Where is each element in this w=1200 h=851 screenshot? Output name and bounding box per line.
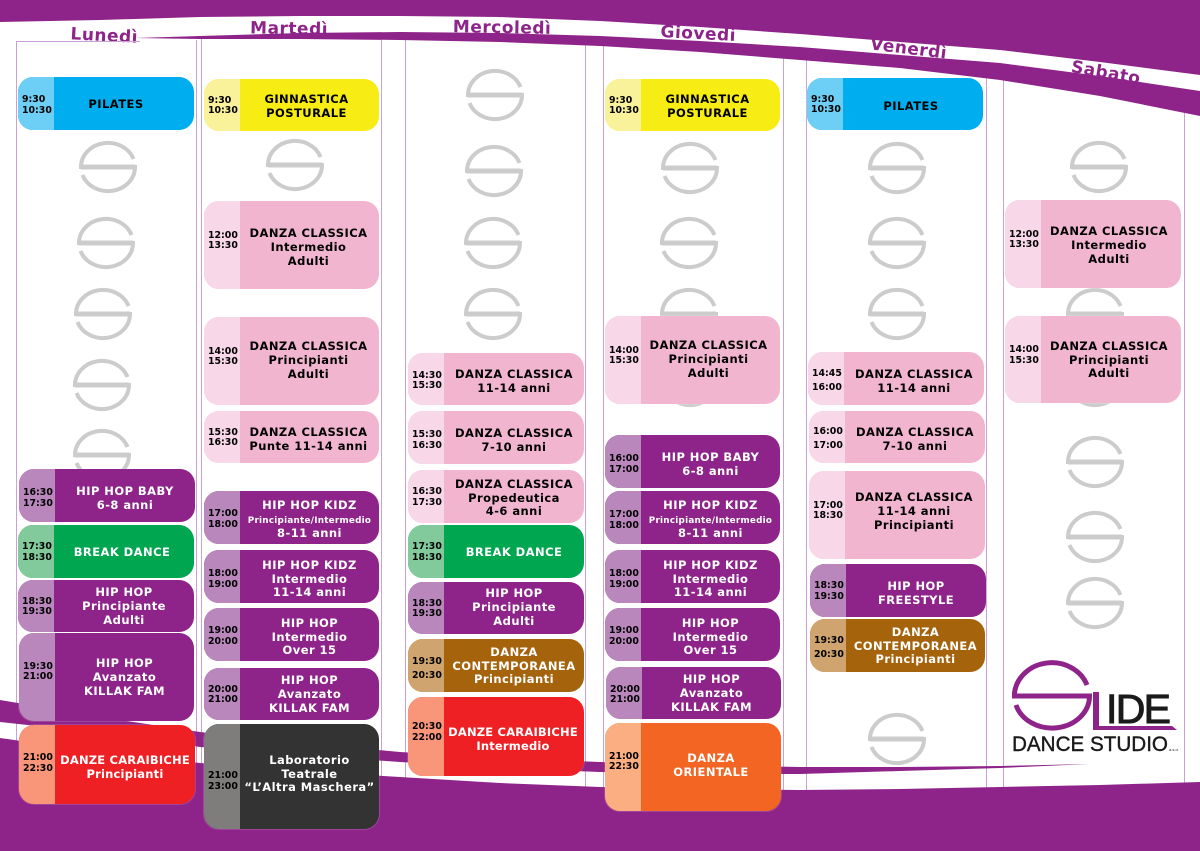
class: Danza Contemporanea: Principianti — [474, 672, 554, 686]
class: Hip Hop Avanzato: HIP HOP — [281, 673, 338, 687]
class: Hip Hop Avanzato: KILLAK FAM — [269, 701, 350, 715]
heading: Venerdì: Venerdì — [869, 34, 948, 64]
class: Hip Hop Principiante: Adulti — [103, 613, 145, 627]
class: Break Dance: 18:30 — [22, 552, 52, 562]
class: Hip Hop Intermedio: 19:00 — [208, 625, 238, 636]
class: Hip Hop Intermedio: Over 15 — [283, 643, 336, 657]
class: Danza Contemporanea: DANZA — [892, 625, 939, 639]
class: Danza Classica Intermedio: DANZA CLASSICA — [1050, 224, 1168, 238]
class: Hip Hop Kidz Intermedio — [605, 550, 780, 603]
class: Danza Classica 11-14: 11-14 anni — [477, 381, 551, 395]
class: Danze Caraibiche: 22:30 — [23, 762, 53, 774]
class: Danza Classica 7-10: 7-10 anni — [883, 439, 947, 453]
class: Hip Hop Principiante — [18, 580, 194, 632]
class: Danza Classica 11-14: 15:30 — [412, 380, 442, 391]
class: Hip Hop Kidz Intermedio: 11-14 anni — [674, 585, 747, 599]
class: Ginnastica Posturale — [204, 79, 379, 131]
class: Danza Classica 11-14: 16:00 — [812, 382, 842, 392]
class: Laboratorio Teatrale: 21:00 — [208, 770, 238, 781]
class: Hip Hop Baby: 16:00 — [609, 453, 639, 464]
class: Danza Classica 7-10: 7-10 anni — [482, 440, 546, 454]
class: Hip Hop Baby: 6-8 anni — [682, 464, 739, 478]
top purple swoosh — [135, 32, 1200, 116]
class: Pilates — [18, 77, 194, 130]
class: Danza Classica 11-14 — [408, 353, 584, 405]
class: Hip Hop Freestyle: HIP HOP — [887, 579, 945, 593]
class: Ginnastica Posturale: 9:30 — [609, 95, 632, 106]
class: Danza Classica 11-14 — [808, 352, 984, 405]
class: Hip Hop Principiante: HIP HOP — [485, 586, 543, 600]
heading: Lunedì: Lunedì — [70, 24, 139, 48]
class: Danze Caraibiche: 20:30 — [412, 721, 442, 732]
class: Break Dance: 17:30 — [412, 541, 442, 552]
class: Danza Classica 11-14 Principianti: 11-14 anni — [877, 504, 951, 518]
class: Hip Hop Principiante: 19:30 — [412, 608, 442, 619]
watermark S marks — [75, 71, 1126, 763]
class: Hip Hop Baby: 17:00 — [609, 464, 639, 474]
class: Hip Hop Avanzato: KILLAK FAM — [84, 684, 165, 698]
class: Hip Hop Kidz Principiante: Principiante/Intermedio — [649, 516, 772, 526]
class: Danza Classica Principianti: 15:30 — [208, 356, 238, 367]
class: Danza Classica Principianti: DANZA CLASSICA — [650, 338, 767, 352]
class: Danza Classica Intermedio: 13:30 — [1009, 239, 1039, 250]
class: Danza Classica Principianti: 15:30 — [1009, 354, 1039, 366]
class: Hip Hop Kidz Principiante: 18:00 — [208, 518, 238, 530]
class: Danza Classica Propedeutica: 17:30 — [412, 496, 442, 508]
class: Danza Classica Principianti — [204, 317, 379, 405]
class: Danza Classica Intermedio: 12:00 — [1009, 229, 1039, 240]
class: Pilates — [807, 78, 983, 130]
class: Danza Classica Intermedio — [1005, 200, 1181, 288]
class: Danza Classica Principianti: Adulti — [688, 366, 729, 380]
class: Danze Caraibiche: Intermedio — [476, 738, 550, 752]
class: Hip Hop Freestyle: FREESTYLE — [878, 592, 954, 606]
class: Danza Contemporanea: 19:30 — [814, 634, 844, 646]
class: Danza Classica 11-14 Principianti: 18:30 — [813, 510, 843, 521]
class: Hip Hop Principiante: 18:30 — [412, 598, 442, 609]
class: Hip Hop Kidz Intermedio: Intermedio — [673, 572, 748, 586]
class: Ginnastica Posturale: 9:30 — [208, 95, 231, 106]
class: Pilates: 10:30 — [811, 104, 841, 115]
class: Hip Hop Baby — [605, 435, 780, 488]
class: Hip Hop Baby: HIP HOP BABY — [76, 484, 174, 498]
class: Danze Caraibiche — [19, 725, 195, 804]
class: Hip Hop Avanzato: KILLAK FAM — [671, 700, 752, 714]
class: Ginnastica Posturale: POSTURALE — [266, 106, 347, 120]
class: Laboratorio Teatrale: Teatrale — [281, 767, 338, 781]
class: Hip Hop Principiante — [408, 582, 584, 634]
heading: Martedì: Martedì — [250, 18, 328, 40]
class: Danza Classica Propedeutica — [408, 470, 584, 523]
class: Danza Orientale: 22:30 — [609, 761, 639, 772]
logo L mark — [1093, 692, 1177, 730]
column: Sabato — [1005, 200, 1181, 403]
class: Danze Caraibiche: Principianti — [87, 766, 163, 780]
class: Danza Classica Principianti: DANZA CLASSICA — [250, 339, 367, 353]
class: Danze Caraibiche: DANZE CARAIBICHE — [60, 753, 190, 767]
heading: Mercoledì: Mercoledì — [453, 17, 551, 39]
class: Hip Hop Baby: 17:30 — [23, 498, 53, 508]
class: Hip Hop Intermedio: 19:00 — [609, 625, 639, 636]
top purple band — [0, 0, 1200, 75]
class: Hip Hop Intermedio: Over 15 — [684, 643, 737, 657]
class: Hip Hop Kidz Intermedio: 18:00 — [609, 568, 639, 579]
class: Danza Contemporanea: DANZA — [490, 645, 538, 659]
class: Danza Contemporanea — [408, 639, 584, 692]
class: Hip Hop Kidz Principiante: 18:00 — [609, 520, 639, 530]
class: Hip Hop Intermedio — [605, 608, 780, 661]
class: Danza Classica Principianti: Principianti — [269, 353, 348, 367]
class: Pilates: 10:30 — [22, 104, 52, 116]
class: Hip Hop Kidz Principiante: 17:00 — [609, 509, 639, 520]
class: Hip Hop Avanzato: Avanzato — [680, 686, 743, 700]
class: Danza Classica Punte: DANZA CLASSICA — [250, 425, 367, 439]
class: Hip Hop Intermedio: 20:00 — [208, 636, 238, 646]
class: Laboratorio Teatrale: “L’Altra Maschera” — [244, 780, 375, 794]
class: Danza Classica 7-10: 15:30 — [412, 429, 442, 440]
logo wordmark Dance Studio: DANCE STUDIO — [1012, 733, 1168, 756]
class: Danza Classica 11-14: 14:30 — [412, 370, 442, 381]
class: Pilates: 9:30 — [811, 94, 834, 105]
class: Danza Classica 7-10: 16:00 — [813, 426, 843, 437]
logo: Slide Dance Studio — [1012, 663, 1179, 756]
logo suffix: a.s.d. — [1169, 747, 1179, 752]
class: Danza Classica Intermedio: 13:30 — [208, 240, 238, 251]
class: Hip Hop Kidz Principiante — [204, 491, 379, 544]
class: Danza Classica 7-10: DANZA CLASSICA — [455, 426, 573, 440]
column: Lunedì — [18, 77, 196, 805]
class: Danza Contemporanea: 20:30 — [814, 648, 844, 660]
class: Hip Hop Kidz Principiante: HIP HOP KIDZ — [262, 498, 357, 512]
class: Hip Hop Kidz Intermedio: Intermedio — [272, 572, 347, 586]
class: Laboratorio Teatrale: 23:00 — [208, 780, 238, 792]
class: Danza Contemporanea: CONTEMPORANEA — [854, 639, 977, 653]
class: Danza Classica Intermedio: Adulti — [1088, 252, 1130, 266]
class: Danza Contemporanea: CONTEMPORANEA — [452, 659, 576, 673]
class: Danza Contemporanea: Principianti — [876, 652, 955, 666]
class: Danza Classica Intermedio: Intermedio — [271, 240, 346, 254]
class: Break Dance — [408, 525, 584, 578]
class: Danze Caraibiche — [408, 697, 584, 776]
class: Danza Classica 7-10 — [408, 411, 584, 464]
class: Danza Classica Principianti: 14:00 — [609, 345, 639, 356]
class: Danza Classica Principianti: 14:00 — [1009, 344, 1039, 355]
class: Hip Hop Avanzato: 20:00 — [208, 684, 238, 695]
class: Danza Classica 7-10: 17:00 — [813, 440, 843, 451]
class: Hip Hop Principiante: Adulti — [493, 614, 535, 628]
class: Break Dance: BREAK DANCE — [74, 545, 170, 559]
class: Pilates: PILATES — [88, 97, 144, 111]
class: Hip Hop Avanzato: HIP HOP — [683, 672, 740, 686]
column: Giovedì — [604, 79, 782, 812]
class: Hip Hop Principiante: Principiante — [472, 600, 556, 614]
class: Danza Classica Principianti: Principianti — [1069, 353, 1149, 367]
class: Hip Hop Avanzato: 19:30 — [23, 661, 53, 672]
class: Danza Classica 7-10 — [809, 411, 985, 463]
class: Danza Classica 11-14: DANZA CLASSICA — [455, 367, 573, 381]
class: Hip Hop Principiante: HIP HOP — [95, 585, 153, 599]
class: Danza Classica Intermedio: DANZA CLASSICA — [250, 226, 367, 240]
class: Break Dance — [18, 525, 194, 578]
class: Hip Hop Baby: HIP HOP BABY — [662, 450, 759, 464]
heading: Giovedì: Giovedì — [660, 22, 737, 46]
class: Hip Hop Avanzato: HIP HOP — [96, 656, 153, 670]
class: Danza Contemporanea: 19:30 — [412, 656, 442, 666]
class: Ginnastica Posturale: POSTURALE — [667, 106, 748, 120]
class: Danza Orientale: 21:00 — [609, 751, 639, 762]
class: Hip Hop Freestyle: 19:30 — [814, 590, 844, 602]
bottom purple field — [0, 738, 1200, 851]
class: Hip Hop Principiante: 18:30 — [22, 596, 52, 607]
class: Danza Classica Intermedio: Intermedio — [1071, 238, 1147, 252]
logo wordmark IDE: IDE — [1106, 686, 1171, 732]
class: Hip Hop Kidz Principiante: 8-11 anni — [277, 526, 342, 540]
class: Hip Hop Freestyle: 18:30 — [814, 580, 844, 591]
class: Danza Classica Punte: 15:30 — [208, 427, 238, 438]
class: Hip Hop Avanzato: 21:00 — [208, 694, 238, 705]
class: Danza Classica 11-14: 14:45 — [812, 368, 842, 378]
class: Danza Classica Punte: Punte 11-14 anni — [249, 439, 368, 453]
logo S mark — [1014, 663, 1090, 728]
class: Hip Hop Baby: 6-8 anni — [97, 498, 153, 512]
class: Danza Classica Principianti — [1005, 316, 1181, 403]
class: Hip Hop Kidz Intermedio: HIP HOP KIDZ — [262, 558, 357, 572]
class: Danza Classica 11-14: 11-14 anni — [877, 380, 951, 394]
day headings — [70, 17, 1142, 89]
class: Hip Hop Kidz Principiante: 8-11 anni — [678, 526, 743, 540]
class: Hip Hop Intermedio: 20:00 — [609, 636, 639, 646]
class: Hip Hop Principiante: 19:30 — [22, 606, 52, 617]
class: Danza Classica Intermedio — [204, 201, 379, 289]
class: Danza Classica Principianti: 15:30 — [609, 355, 639, 366]
class: Hip Hop Kidz Intermedio: 19:00 — [609, 578, 639, 590]
class: Hip Hop Intermedio — [204, 608, 379, 661]
class: Hip Hop Intermedio: HIP HOP — [281, 616, 338, 630]
class: Danza Classica Intermedio: Adulti — [288, 254, 329, 268]
class: Danza Classica Punte: 16:30 — [208, 437, 238, 448]
class: Danza Classica 7-10: 16:30 — [412, 440, 442, 450]
class: Danza Classica Propedeutica: 16:30 — [412, 486, 442, 497]
class: Laboratorio Teatrale: Laboratorio — [269, 753, 350, 767]
class: Danza Contemporanea — [810, 619, 985, 672]
class: Danza Classica Principianti: Principianti — [669, 352, 748, 366]
class: Hip Hop Kidz Principiante: HIP HOP KIDZ — [663, 498, 758, 512]
class: Hip Hop Kidz Principiante — [605, 491, 780, 544]
heading: Sabato: Sabato — [1070, 57, 1142, 89]
class: Ginnastica Posturale — [605, 79, 780, 131]
class: Hip Hop Baby — [19, 469, 195, 522]
class: Danza Classica Principianti: DANZA CLASSICA — [1050, 339, 1168, 353]
class: Ginnastica Posturale: 10:30 — [208, 105, 238, 116]
bottom purple swoosh — [0, 700, 1090, 774]
class: Danza Classica Propedeutica: 4-6 anni — [486, 504, 542, 518]
class: Hip Hop Kidz Intermedio: 11-14 anni — [273, 585, 346, 599]
class: Hip Hop Avanzato: 21:00 — [610, 694, 640, 705]
column: Martedì — [203, 79, 380, 830]
class: Danza Classica Propedeutica: DANZA CLASSICA — [455, 477, 573, 491]
class: Hip Hop Kidz Intermedio — [204, 550, 379, 603]
class: Danza Classica 7-10: DANZA CLASSICA — [856, 425, 974, 439]
class: Ginnastica Posturale: 10:30 — [609, 105, 639, 116]
class: Hip Hop Kidz Intermedio: HIP HOP KIDZ — [663, 558, 758, 572]
class: Danze Caraibiche: DANZE CARAIBICHE — [448, 725, 578, 739]
class: Hip Hop Avanzato — [606, 667, 781, 719]
class: Hip Hop Freestyle — [810, 564, 986, 617]
class: Danza Contemporanea: 20:30 — [412, 670, 442, 680]
class: Danza Orientale: ORIENTALE — [673, 765, 749, 779]
class: Hip Hop Kidz Intermedio: 19:00 — [208, 578, 238, 590]
class: Danze Caraibiche: 22:00 — [412, 732, 442, 742]
class: Danze Caraibiche: 21:00 — [23, 752, 53, 763]
class: Danza Classica 11-14 Principianti: 17:00 — [813, 500, 843, 511]
class: Danza Classica Principianti — [605, 316, 780, 404]
class: Danza Classica 11-14 Principianti: Principianti — [874, 518, 954, 532]
class: Hip Hop Kidz Principiante: 17:00 — [208, 508, 238, 519]
class: Danza Classica 11-14 Principianti: DANZA CLASSICA — [855, 490, 973, 504]
class: Break Dance: 17:30 — [22, 541, 52, 552]
class: Danza Classica Intermedio: 12:00 — [208, 230, 238, 241]
class: Hip Hop Avanzato: Avanzato — [278, 687, 341, 701]
class: Hip Hop Baby: 16:30 — [23, 487, 53, 498]
class: Hip Hop Kidz Intermedio: 18:00 — [208, 568, 238, 579]
class: Hip Hop Avanzato — [204, 668, 379, 720]
class: Hip Hop Avanzato: Avanzato — [93, 670, 156, 684]
class: Hip Hop Intermedio: Intermedio — [673, 630, 748, 644]
class: Hip Hop Principiante: Principiante — [82, 599, 166, 613]
class: Laboratorio Teatrale — [204, 724, 379, 829]
column: Venerdì — [806, 78, 987, 672]
class: Danza Classica Principianti: Adulti — [288, 367, 329, 381]
class: Danza Classica 11-14: DANZA CLASSICA — [855, 367, 973, 381]
class: Ginnastica Posturale: GINNASTICA — [665, 92, 750, 106]
class: Hip Hop Intermedio: Intermedio — [272, 630, 347, 644]
class: Danza Classica Principianti: Adulti — [1088, 366, 1130, 380]
class: Danza Classica Principianti: 14:00 — [208, 346, 238, 357]
class: Danza Orientale — [605, 723, 781, 811]
class: Hip Hop Avanzato: 20:00 — [610, 684, 640, 695]
class: Break Dance: 18:30 — [412, 552, 442, 562]
class: Hip Hop Avanzato: 21:00 — [23, 671, 53, 682]
class: Hip Hop Kidz Principiante: Principiante/Intermedio — [248, 516, 371, 526]
class: Ginnastica Posturale: GINNASTICA — [264, 92, 349, 106]
class: Hip Hop Avanzato — [19, 633, 194, 721]
class: Danza Classica Propedeutica: Propedeutica — [468, 491, 560, 505]
class: Hip Hop Intermedio: HIP HOP — [682, 616, 739, 630]
class: Break Dance: BREAK DANCE — [466, 545, 562, 559]
class: Danza Classica 11-14 Principianti — [809, 471, 985, 559]
class: Danza Classica Punte — [204, 411, 379, 463]
class: Danza Orientale: DANZA — [687, 751, 735, 765]
class: Pilates: 9:30 — [22, 94, 45, 105]
class: Pilates: PILATES — [883, 99, 939, 113]
column: Mercoledì — [407, 353, 585, 776]
